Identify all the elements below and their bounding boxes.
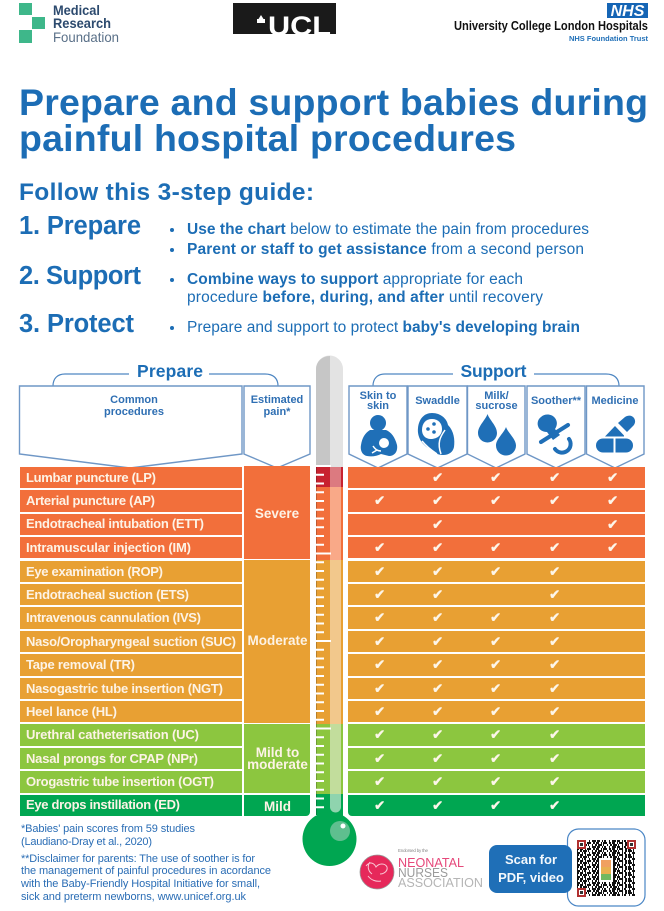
procedure names: Heel lance (HL)	[26, 704, 117, 719]
logo: Medical Research Foundation	[19, 2, 119, 45]
step 2: support: procedure before, during, and after until recovery	[187, 289, 543, 306]
pain level: mild	[244, 795, 310, 816]
header: skin to skin	[349, 386, 407, 468]
logo: Neonatal Nurses Association: ASSOCIATION	[398, 875, 483, 890]
support check marks: ✔✔✔✔	[374, 657, 560, 673]
pain level: severe: Severe	[255, 506, 300, 521]
icon: medicine	[596, 416, 635, 452]
header: common procedures: Common	[110, 394, 158, 406]
footnote: soother disclaimer: **Disclaimer for parents: The use of soother is for	[21, 853, 255, 865]
logo: Neonatal Nurses Association: Endorsed by the	[398, 848, 428, 853]
pain level: severe	[244, 466, 310, 559]
pain level: moderate	[244, 560, 310, 723]
footnote: soother disclaimer: the management of painful procedures in acordance	[21, 865, 271, 877]
header: swaddle: Swaddle	[415, 395, 460, 407]
header: estimated pain: Estimated	[251, 394, 303, 406]
procedure names: Intramuscular injection (IM)	[26, 540, 191, 555]
icon: soother	[538, 414, 571, 453]
footnote: soother disclaimer: with the Baby-Friendly Hospital Initiative for small,	[20, 878, 260, 890]
procedure names: Eye examination (ROP)	[26, 564, 163, 579]
logo: Medical Research Foundation: Research	[53, 15, 111, 31]
icon: skin to skin	[361, 415, 397, 456]
support check marks: ✔✔✔✔	[374, 727, 560, 743]
support check marks: ✔✔✔✔	[374, 564, 560, 580]
logo: University College London Hospitals NHS	[454, 3, 648, 43]
logo: Medical Research Foundation: Medical	[53, 2, 100, 18]
procedure names: Endotracheal suction (ETS)	[26, 587, 189, 602]
header: medicine: Medicine	[591, 395, 639, 407]
pain level: mild: Mild	[264, 799, 291, 814]
heading: Support with bracket	[373, 361, 619, 386]
step 1: prepare	[19, 212, 589, 258]
subheading: 3-step guide: Follow this 3-step guide:	[19, 179, 314, 206]
step 2: support: 2. Support	[19, 262, 142, 290]
header: soother	[527, 386, 585, 468]
step 1: prepare: Parent or staff to get assistance from a second person	[187, 241, 584, 258]
step 3: protect	[19, 310, 580, 338]
logo: Neonatal Nurses Association: NEONATAL	[398, 855, 464, 870]
header: estimated pain: pain*	[264, 406, 291, 418]
title	[19, 81, 648, 159]
rows: mild to moderate pain	[20, 724, 645, 793]
procedure names: Nasogastric tube insertion (NGT)	[26, 681, 223, 696]
step 3: protect: 3. Protect	[19, 310, 134, 338]
heading: Prepare with bracket	[53, 361, 278, 386]
procedure names: Urethral catheterisation (UC)	[26, 727, 199, 742]
step 2: support	[19, 262, 543, 306]
rows: moderate pain	[20, 561, 645, 722]
header: common procedures	[20, 386, 242, 468]
procedure names: Eye drops instillation (ED)	[26, 797, 180, 812]
header: milk or sucrose	[468, 386, 525, 468]
procedure names	[26, 470, 236, 812]
title: Prepare and support babies during	[19, 81, 648, 123]
procedure names: Intravenous cannulation (IVS)	[26, 610, 201, 625]
footnote: pain scores	[21, 823, 196, 848]
support check marks: ✔✔✔✔✔	[374, 540, 618, 556]
rows: severe pain	[20, 467, 645, 558]
procedure names: Orogastric tube insertion (OGT)	[26, 774, 214, 789]
logo: University College London Hospitals NHS: NHS Foundation Trust	[569, 34, 648, 43]
logo: UCL: UCL	[268, 11, 331, 41]
heading: Prepare with bracket: Prepare	[137, 361, 203, 381]
logo: Neonatal Nurses Association: NURSES	[398, 865, 448, 880]
header: milk or sucrose: sucrose	[475, 400, 518, 412]
step 1: prepare: Use the chart below to estimate the pain from procedures	[187, 221, 589, 238]
title: painful hospital procedures	[19, 117, 516, 159]
support check marks: ✔✔✔✔	[374, 634, 560, 650]
step 2: support: Combine ways to support appropriate for each	[187, 271, 523, 288]
support check marks: ✔✔✔✔	[432, 470, 618, 486]
header: soother: Soother**	[531, 395, 582, 407]
logo: Medical Research Foundation: Foundation	[53, 29, 119, 45]
footnote: pain scores: (Laudiano-Dray et al., 2020)	[21, 836, 152, 848]
header: skin to skin: Skin to	[360, 390, 397, 402]
support check marks: ✔✔✔✔	[374, 798, 560, 814]
procedure names: Tape removal (TR)	[26, 657, 135, 672]
header: estimated pain	[244, 386, 310, 468]
logo: UCL	[233, 3, 336, 41]
support check marks: ✔✔✔✔	[374, 751, 560, 767]
QR code panel	[568, 829, 645, 906]
logo: University College London Hospitals NHS: NHS	[611, 3, 645, 20]
pain level: mild to moderate	[244, 724, 310, 793]
logo: Neonatal Nurses Association	[360, 848, 483, 890]
pain levels column	[244, 466, 310, 816]
call to action: scan for PDF, video: PDF, video	[498, 870, 564, 885]
pain level: mild to moderate: Mild to	[256, 745, 299, 760]
icon: drops	[478, 414, 516, 456]
support check marks: ✔✔	[432, 517, 618, 533]
header: medicine	[586, 386, 644, 468]
support check marks: ✔✔✔✔	[374, 704, 560, 720]
step 3: protect: Prepare and support to protect baby's developing brain	[187, 319, 580, 336]
support check marks: ✔✔✔✔	[374, 681, 560, 697]
call to action: scan for PDF, video	[489, 845, 572, 893]
procedure names: Endotracheal intubation (ETT)	[26, 516, 204, 531]
support check marks: ✔✔✔✔✔	[374, 493, 618, 509]
icon: swaddle	[418, 413, 454, 455]
header: swaddle	[408, 386, 467, 468]
procedure names: Naso/Oropharyngeal suction (SUC)	[26, 634, 236, 649]
thermometer	[302, 356, 356, 866]
support check marks: ✔✔✔✔	[374, 774, 560, 790]
support check marks	[374, 470, 618, 814]
footnote: soother disclaimer	[20, 853, 271, 903]
procedure names: Nasal prongs for CPAP (NPr)	[26, 751, 198, 766]
procedure names: Arterial puncture (AP)	[26, 493, 155, 508]
header: milk or sucrose: Milk/	[484, 390, 509, 402]
footnote: pain scores: *Babies' pain scores from 59 studies	[21, 823, 196, 835]
rows: mild pain	[20, 795, 645, 816]
support check marks: ✔✔✔✔	[374, 610, 560, 626]
footnote: soother disclaimer: sick and preterm newborns, www.unicef.org.uk	[21, 891, 246, 903]
procedure names: Lumbar puncture (LP)	[26, 470, 156, 485]
header: skin to skin: skin	[367, 400, 389, 412]
support check marks: ✔✔✔	[374, 587, 560, 603]
pain level: mild to moderate: moderate	[247, 757, 308, 772]
step 1: prepare: 1. Prepare	[19, 212, 141, 240]
pain level: moderate: Moderate	[247, 633, 308, 648]
heading: Support with bracket: Support	[460, 361, 527, 381]
call to action: scan for PDF, video: Scan for	[505, 852, 557, 867]
header: common procedures: procedures	[104, 406, 164, 418]
